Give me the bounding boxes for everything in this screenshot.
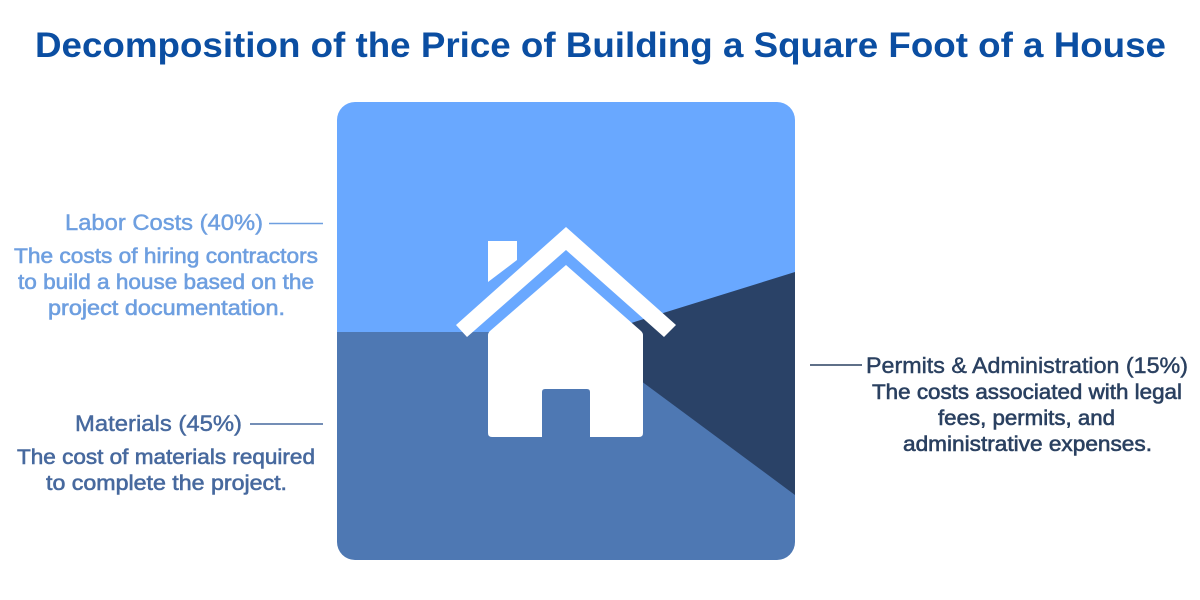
house body with door (488, 265, 643, 437)
description: labor costs: project documentation. (48, 297, 285, 320)
heading: materials: Materials (45%) (75, 411, 242, 436)
description: permits and administration: The costs associated with legal (872, 381, 1182, 404)
callout: materials (17, 411, 323, 495)
house roof (456, 227, 676, 337)
description: labor costs (14, 245, 318, 320)
title: Decomposition of the Price of Building a Square Foot of a House (35, 26, 1166, 65)
callout: labor costs (14, 210, 323, 320)
description: labor costs: to build a house based on the (18, 271, 314, 294)
description: permits and administration: fees, permits, and (938, 407, 1115, 430)
leader line: permits (810, 364, 862, 366)
leader line: labor costs (269, 222, 323, 224)
description: materials: The cost of materials required (17, 446, 315, 469)
leader line: materials (250, 423, 323, 425)
segment: labor costs 40% (337, 102, 795, 332)
description: materials (17, 446, 315, 495)
heading: labor costs: Labor Costs (40%) (65, 210, 263, 235)
heading: permits and administration: Permits & Administration (15%) (866, 353, 1188, 378)
house chimney (488, 241, 517, 282)
panel: cost breakdown square (337, 102, 795, 560)
segment: materials 45% (337, 332, 795, 560)
description: materials: to complete the project. (46, 472, 287, 495)
callout: permits and administration (810, 353, 1188, 456)
description: permits and administration (872, 381, 1182, 456)
description: permits and administration: administrative expenses. (903, 433, 1152, 456)
segment: permits and administration 15% (632, 272, 795, 495)
icon: house (456, 227, 676, 437)
description: labor costs: The costs of hiring contractors (14, 245, 318, 268)
